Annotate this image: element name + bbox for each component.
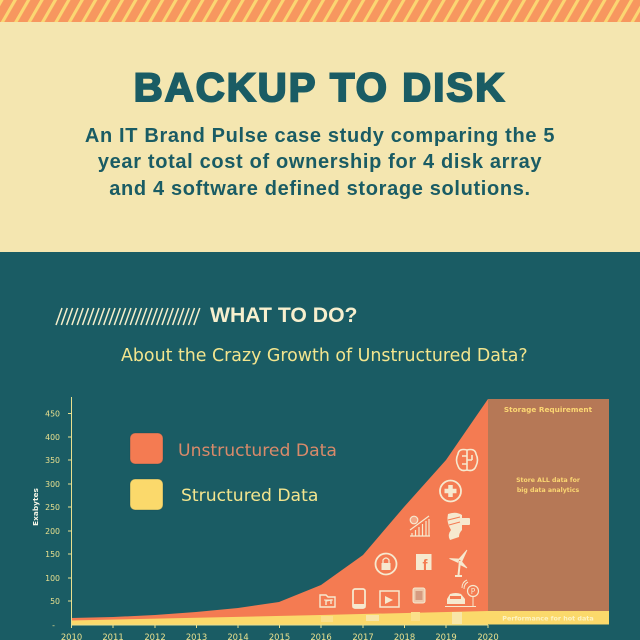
y axis: 150 xyxy=(45,550,60,559)
title: BACKUP TO DISK xyxy=(134,66,506,110)
icon: VR headset head xyxy=(447,513,470,540)
icon: connected car xyxy=(445,580,478,606)
y axis: - xyxy=(52,621,55,630)
y axis: 100 xyxy=(45,574,60,583)
icon: facebook xyxy=(416,554,432,574)
header panel xyxy=(0,0,640,252)
slash decoration xyxy=(55,308,200,326)
subtitle xyxy=(85,124,555,200)
chart subtitle: About the Crazy Growth of Unstructured Data? xyxy=(121,346,528,366)
icon: music folder xyxy=(320,595,335,607)
heading text: WHAT TO DO? xyxy=(210,304,358,327)
y axis xyxy=(45,397,72,630)
structured data area: Performance for hot data xyxy=(502,614,594,622)
storage requirement panel: Store ALL data for xyxy=(516,477,581,484)
subtitle: year total cost of ownership for 4 disk array xyxy=(98,151,542,173)
y axis label: Exabytes xyxy=(31,487,40,526)
y axis: 200 xyxy=(45,527,60,536)
y axis: 400 xyxy=(45,433,60,442)
y axis: 450 xyxy=(45,410,60,418)
striped top band xyxy=(0,0,640,22)
icon: facebook: f xyxy=(422,557,428,574)
icon: wind turbine xyxy=(450,550,467,576)
icon: smartphone xyxy=(352,589,366,608)
structured data area xyxy=(71,611,609,624)
y axis: 50 xyxy=(50,597,60,606)
icon: smartwatch xyxy=(413,588,425,603)
subtitle: and 4 software defined storage solutions. xyxy=(109,178,531,200)
icon: medical cross xyxy=(440,480,461,502)
legend swatch: unstructured xyxy=(130,433,163,464)
storage requirement panel: Storage Requirement xyxy=(504,405,593,414)
x axis xyxy=(61,625,499,640)
y axis: 250 xyxy=(45,503,60,512)
icon: connected car: P xyxy=(471,587,476,596)
legend label: structured: Structured Data xyxy=(181,486,318,506)
storage requirement panel: big data analytics xyxy=(517,487,579,494)
icon: brain xyxy=(456,450,478,470)
icon: video player xyxy=(380,591,399,607)
y axis: 350 xyxy=(45,456,60,465)
icon: lock xyxy=(376,554,396,574)
icon: analytics chart xyxy=(410,516,430,536)
unstructured data area xyxy=(71,399,488,621)
y axis: 300 xyxy=(45,480,60,489)
legend swatch: structured xyxy=(130,479,163,510)
storage requirement panel xyxy=(488,399,609,613)
subtitle: An IT Brand Pulse case study comparing the 5 xyxy=(85,124,555,146)
section heading: what to do xyxy=(55,304,358,327)
legend label: unstructured: Unstructured Data xyxy=(178,441,337,461)
